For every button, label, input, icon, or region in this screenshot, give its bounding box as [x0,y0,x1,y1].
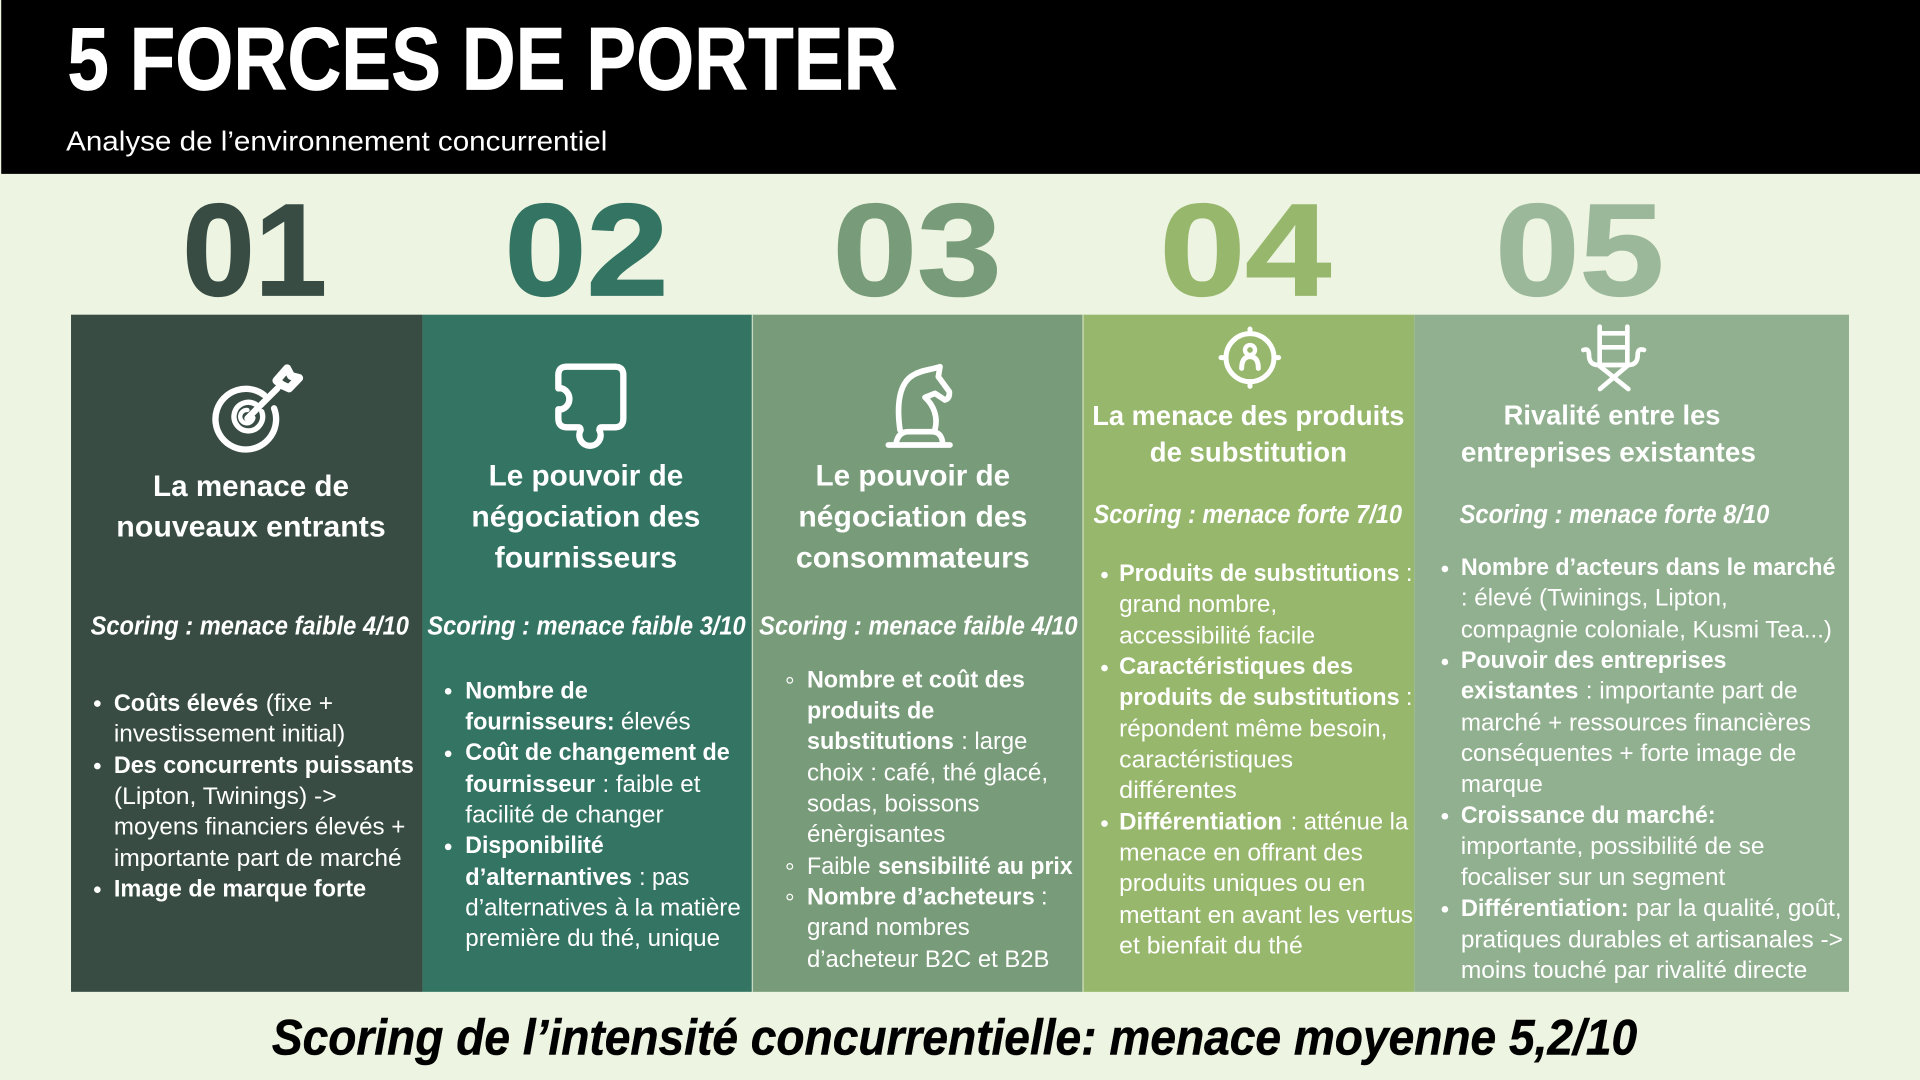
bullet list: Nombre d’acheteurs [807,883,1035,910]
bullet list: Coûts élevés [114,690,258,717]
bullet list: importante, possibilité de se [1461,833,1764,860]
title: 5 FORCES DE PORTER [67,9,898,108]
bullet list: focaliser sur un segment [1461,864,1725,891]
bullet list: première du thé, unique [465,925,720,952]
bullet list: grand nombres [807,914,970,941]
bullet list: d’alternantives [465,864,632,891]
bullet list [787,667,1073,973]
scoring: Scoring : menace faible 4/10 [759,612,1078,640]
icon: person in crosshair [1221,329,1279,386]
bullet list: : large [961,728,1027,755]
heading: de substitution [1150,437,1347,468]
bullet list: fournisseur [465,771,596,798]
bullet list: grand nombre, [1119,591,1277,618]
bullet list: Différentiation [1119,809,1282,836]
bullet list: investissement initial) [114,721,345,748]
heading: Rivalité entre les [1504,399,1720,430]
bullet list: produits uniques ou en [1119,870,1365,897]
bullet list: produits de [807,697,934,724]
bullet list: par la qualité, goût, [1636,895,1842,922]
icon: target with arrow [215,368,299,449]
heading: La menace de [153,470,349,503]
number 01: 01 [182,176,327,323]
panel: fournisseurs [422,315,752,992]
bullet list: Image de marque forte [114,875,366,902]
footer score: Scoring de l’intensité concurrentielle: menace moyenne 5,2/10 [272,1009,1637,1065]
bullet list: répondent même besoin, [1119,716,1387,743]
bullet list: caractéristiques [1119,746,1293,773]
bullet list: élevés [621,708,691,735]
number 05: 05 [1495,176,1664,323]
bullet list: Coût de changement de [465,739,730,766]
bullet list: Disponibilité [465,832,604,859]
heading: négociation des [471,501,700,534]
bullet list: Caractéristiques des [1119,653,1353,680]
bullet list: fournisseurs: [465,708,615,735]
bullet list: choix : café, thé glacé, [807,760,1048,787]
bullet list: (fixe + [266,690,333,717]
heading: fournisseurs [495,542,677,575]
bullet list: produits de substitutions [1119,684,1400,711]
number 02: 02 [504,176,669,323]
bullet list: : pas [639,864,689,891]
bullet list: sensibilité au prix [878,853,1073,880]
bullet list [1101,560,1413,959]
bullet list: Faible [807,853,871,880]
bullet list: : importante part de [1586,678,1798,705]
scoring: Scoring : menace faible 4/10 [91,612,410,640]
bullet list: marque [1461,771,1543,798]
bullet list: importante part de marché [114,845,402,872]
bullet list: sodas, boissons [807,790,980,817]
number 03: 03 [833,176,1002,323]
heading: Le pouvoir de [816,460,1010,493]
icon: puzzle piece [558,367,623,446]
bullet list [1442,554,1843,984]
bullet list: différentes [1119,777,1237,804]
heading [1092,400,1404,468]
bullet list: moins touché par rivalité directe [1461,957,1807,984]
bullet list: : faible et [602,771,701,798]
header band [1,0,1920,174]
bullet list: Nombre et coût des [807,667,1025,694]
icon: chess knight [888,367,950,445]
bullet list: substitutions [807,728,954,755]
bullet list: Pouvoir des entreprises [1461,647,1727,674]
bullet list: : [1406,560,1413,587]
bullet list: accessibilité facile [1119,623,1315,650]
bullet list: Croissance du marché: [1461,802,1716,829]
panel: nouveaux entrants [71,315,422,992]
heading [116,470,386,543]
heading [471,460,700,575]
bullet list: et bienfait du thé [1119,932,1303,959]
bullet list: Nombre de [465,678,588,705]
scoring: Scoring : menace forte 7/10 [1093,501,1403,529]
bullet list: existantes [1461,678,1578,705]
bullet list: marché + ressources financières [1461,710,1811,737]
bullet list: facilité de changer [465,801,664,828]
icon: director chair [1583,327,1644,389]
bullet list: (Lipton, Twinings) -> [114,783,337,810]
bullet list: conséquentes + forte image de [1461,740,1796,767]
bullet list: : élevé (Twinings, Lipton, [1461,585,1728,612]
panel: consommateurs [752,315,1082,992]
scoring: Scoring : menace faible 3/10 [427,612,746,640]
bullet list: menace en offrant des [1119,839,1363,866]
bullet list: : atténue la [1291,809,1409,836]
scoring: Scoring : menace forte 8/10 [1460,501,1770,529]
heading: négociation des [798,501,1027,534]
bullet list: Nombre d’acteurs dans le marché [1461,554,1836,581]
bullet list: d’acheteur B2C et B2B [807,946,1049,973]
number 04: 04 [1160,176,1331,323]
panel: produits de substitution [1082,315,1414,992]
panel: rivalité [1414,315,1849,992]
bullet list: énèrgisantes [807,821,945,848]
bullet list: pratiques durables et artisanales -> [1461,926,1843,953]
bullet list: : [1041,883,1048,910]
bullet list: Différentiation: [1461,895,1629,922]
bullet list [94,690,414,902]
subtitle: Analyse de l’environnement concurrentiel [66,126,607,157]
bullet list: moyens financiers élevés + [114,814,405,841]
heading [796,460,1030,575]
bullet list [445,678,741,952]
bullet list: Produits de substitutions [1119,560,1400,587]
bullet list: mettant en avant les vertus [1119,902,1413,929]
heading: La menace des produits [1092,400,1404,431]
bullet list: : [1406,684,1413,711]
heading [1461,399,1756,468]
bullet list: compagnie coloniale, Kusmi Tea...) [1461,616,1832,643]
bullet list: d’alternatives à la matière [465,894,741,921]
heading: entreprises existantes [1461,437,1756,468]
heading: consommateurs [796,542,1030,575]
heading: nouveaux entrants [116,510,386,543]
bullet list: Des concurrents puissants [114,752,414,779]
heading: Le pouvoir de [489,460,683,493]
